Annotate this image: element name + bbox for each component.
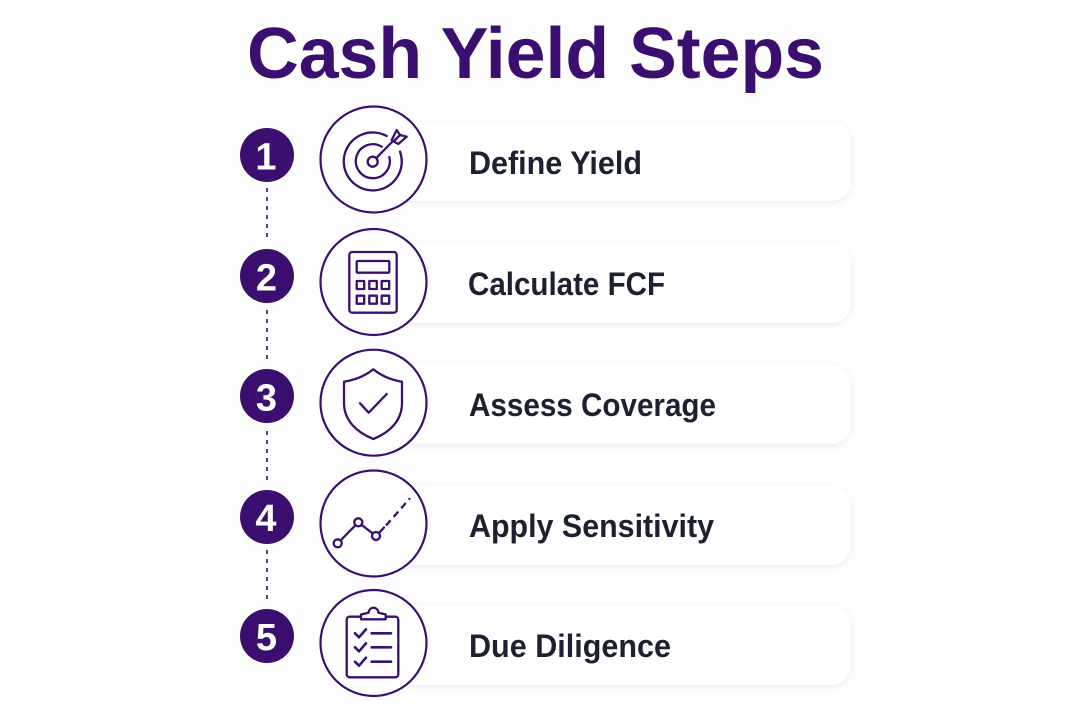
title: Cash Yield Steps: [247, 14, 824, 94]
step 3: [240, 350, 851, 456]
badge 3: [240, 369, 294, 423]
step 1: [240, 106, 851, 212]
badge 3: 3: [256, 378, 277, 420]
connector: step 2 to 3: [266, 310, 268, 362]
icon circle: calculator: [320, 229, 426, 335]
label: calculate fcf: Calculate FCF: [468, 266, 665, 302]
step 2: [240, 229, 851, 335]
icon circle: clipboard: [320, 590, 426, 696]
badge 2: 2: [256, 258, 277, 300]
badge 4: 4: [255, 498, 277, 540]
step 5: [240, 590, 851, 696]
icon circle: trend line: [320, 470, 426, 576]
badge 2: [240, 249, 294, 303]
card: due diligence: [395, 605, 851, 685]
connector: step 1 to 2: [266, 188, 268, 242]
badge 5: [240, 609, 294, 663]
icon circle: shield: [320, 350, 426, 456]
card: apply sensitivity: [395, 486, 851, 565]
badge 1: 1: [255, 136, 277, 178]
label: assess coverage: Assess Coverage: [469, 387, 716, 423]
step 4: [240, 470, 851, 576]
label: define yield: Define Yield: [469, 145, 642, 181]
label: due diligence: Due Diligence: [469, 628, 671, 664]
card: define yield: [395, 122, 851, 201]
badge 1: [240, 128, 294, 182]
card: calculate fcf: [395, 243, 851, 323]
card: assess coverage: [395, 364, 851, 444]
badge 4: [240, 490, 294, 544]
connector: step 4 to 5: [266, 550, 268, 604]
icon circle: target: [320, 106, 426, 212]
label: apply sensitivity: Apply Sensitivity: [469, 508, 714, 544]
badge 5: 5: [256, 617, 277, 659]
connector: step 3 to 4: [266, 431, 268, 484]
